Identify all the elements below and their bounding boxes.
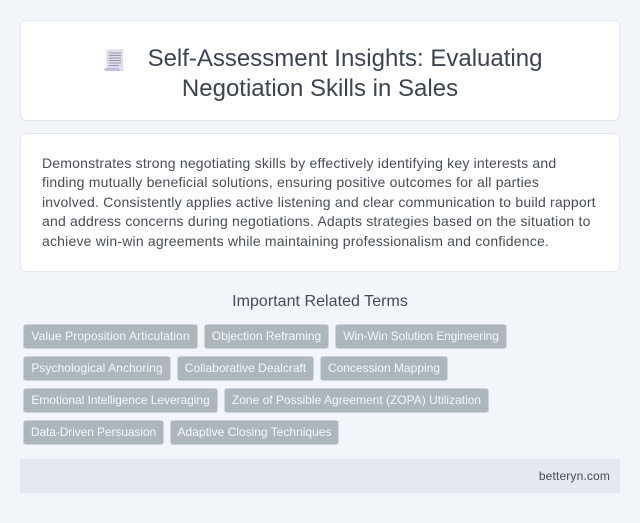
tag: Zone of Possible Agreement (ZOPA) Utilization <box>232 393 481 407</box>
footer text: betteryn.com <box>539 469 610 483</box>
related terms heading: Important Related Terms <box>232 293 408 310</box>
description text: achieve win-win agreements while maintaining professionalism and confidence. <box>42 233 549 249</box>
tag: Collaborative Dealcraft <box>185 361 306 375</box>
description text: and address concerns during negotiations. Adapts strategies based on the situation to <box>42 213 591 229</box>
tag <box>335 324 507 349</box>
icon: document scroll <box>104 49 124 71</box>
tag <box>204 324 329 349</box>
tag <box>224 388 489 413</box>
tags <box>23 324 507 445</box>
description panel <box>20 133 620 272</box>
tag: Adaptive Closing Techniques <box>178 425 331 439</box>
tag: Concession Mapping <box>328 361 440 375</box>
tag <box>23 388 218 413</box>
tag: Data-Driven Persuasion <box>31 425 156 439</box>
tag: Psychological Anchoring <box>31 361 163 375</box>
tag: Objection Reframing <box>212 329 321 343</box>
title <box>148 45 542 102</box>
title: Negotiation Skills in Sales <box>182 75 458 102</box>
tag: Emotional Intelligence Leveraging <box>31 393 210 407</box>
description text <box>42 155 596 249</box>
tag <box>23 324 198 349</box>
tag <box>320 356 448 381</box>
description text: involved. Consistently applies active listening and clear communication to build rapport <box>42 194 596 210</box>
header panel <box>20 20 620 121</box>
tag <box>23 420 164 445</box>
tag: Value Proposition Articulation <box>31 329 190 343</box>
footer bar <box>20 459 620 493</box>
tag: Win-Win Solution Engineering <box>343 329 499 343</box>
description text: finding mutually beneficial solutions, ensuring positive outcomes for all parties <box>42 174 539 190</box>
tag <box>23 356 171 381</box>
description text: Demonstrates strong negotiating skills by effectively identifying key interests and <box>42 155 556 171</box>
tag <box>170 420 339 445</box>
tag <box>177 356 314 381</box>
title: Self-Assessment Insights: Evaluating <box>148 45 542 72</box>
